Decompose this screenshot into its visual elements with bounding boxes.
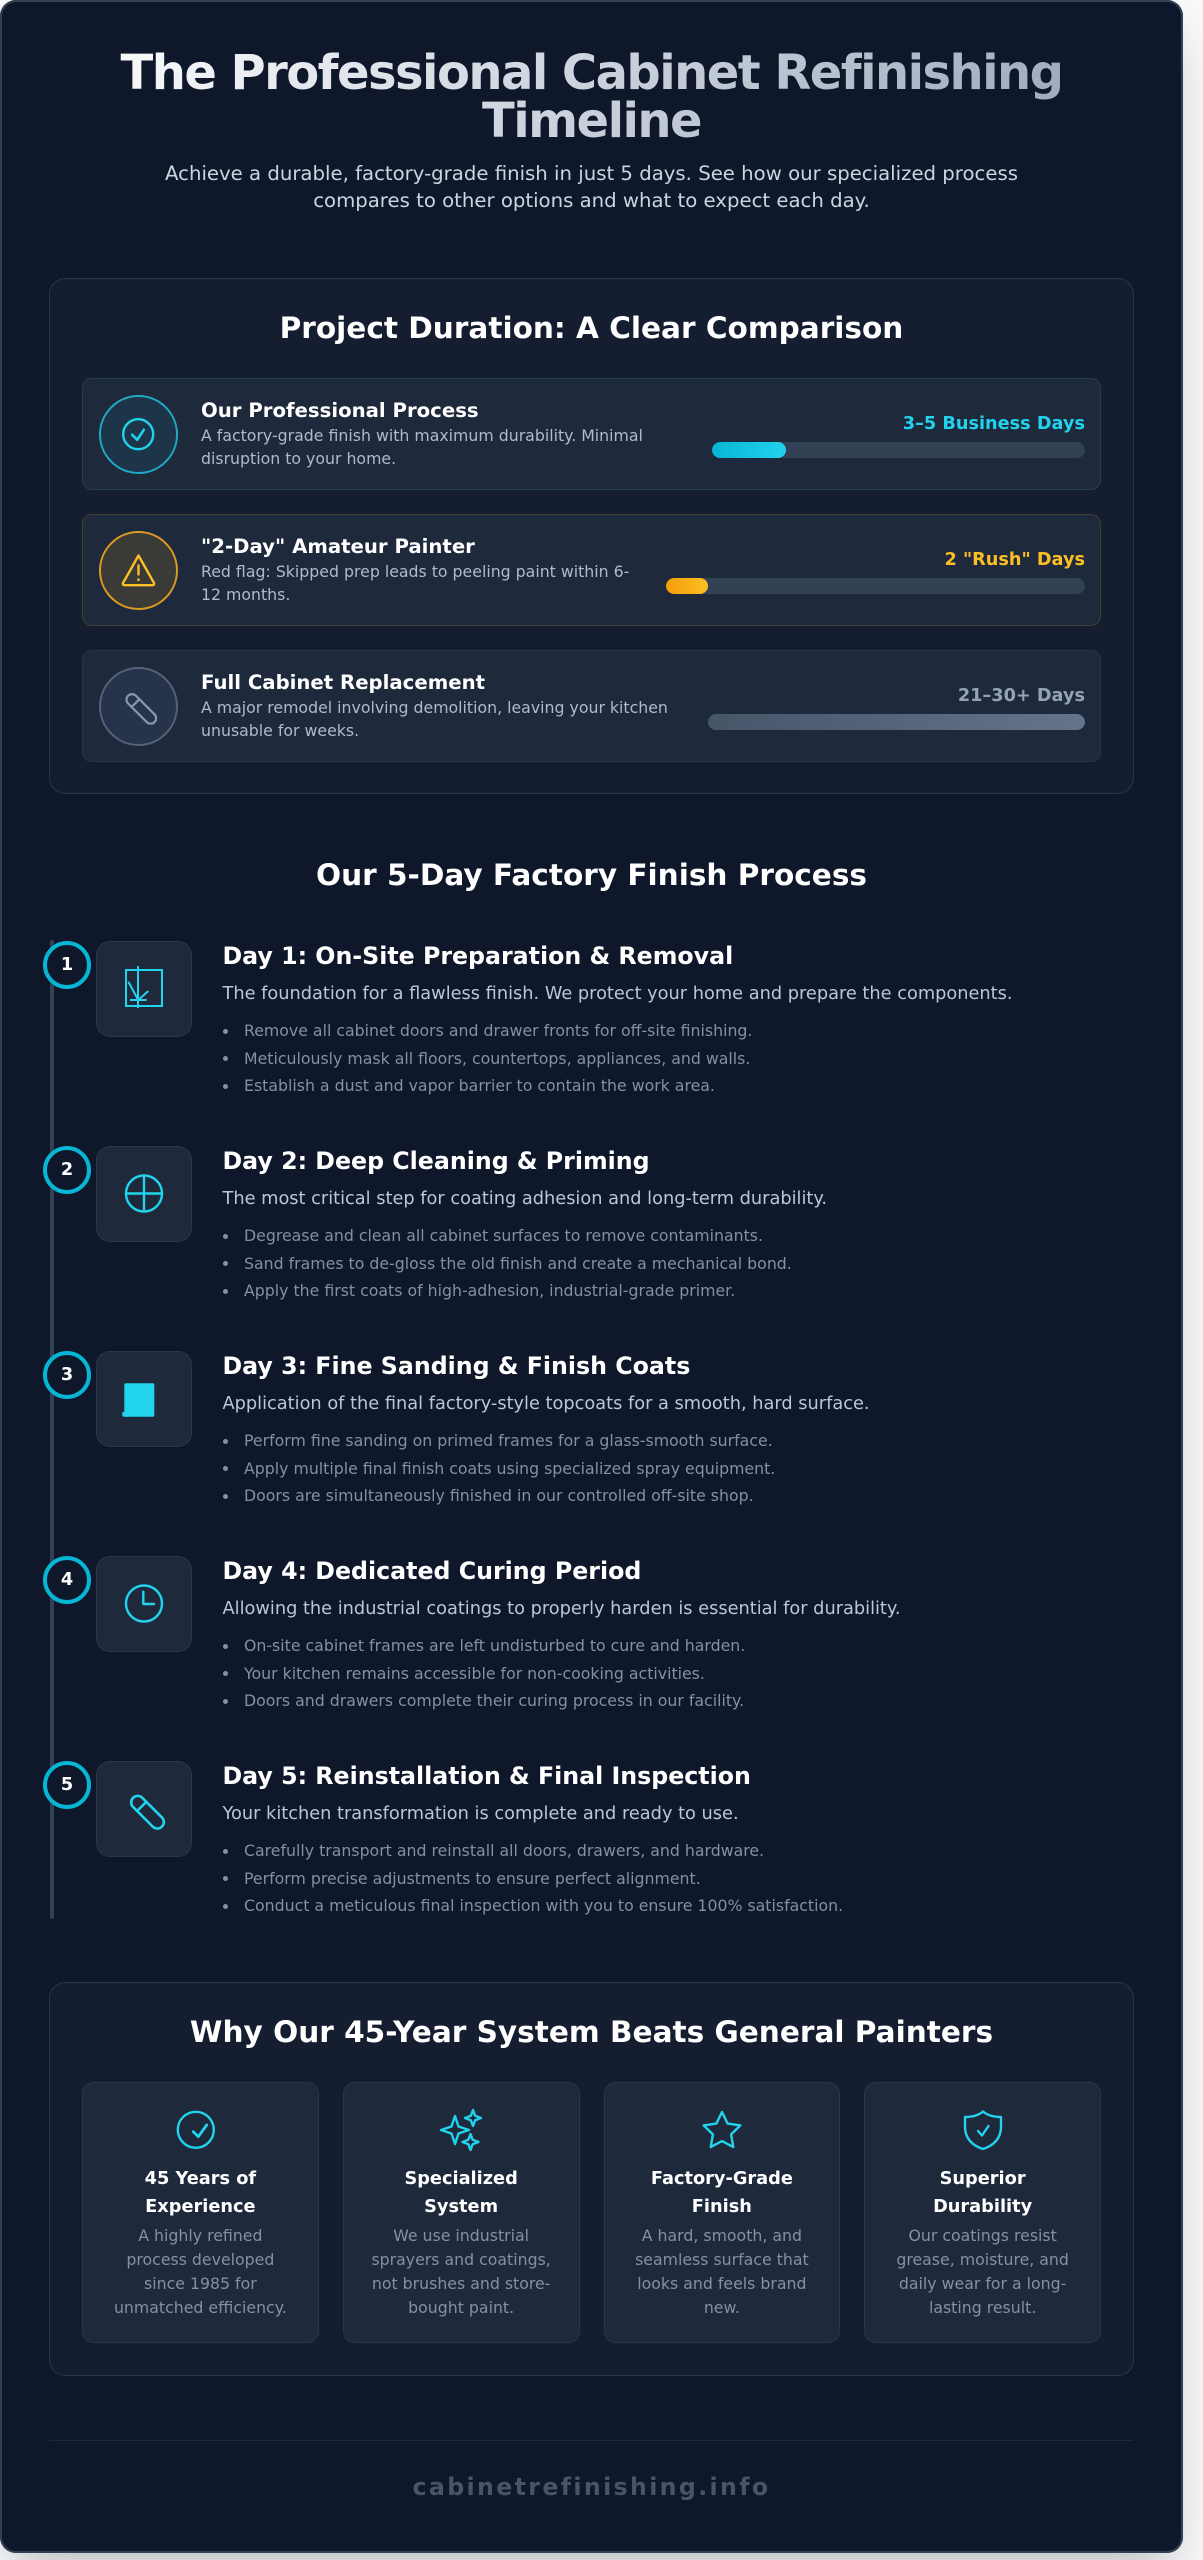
- day description: Your kitchen transformation is complete and ready to use.: [222, 1804, 739, 1824]
- card text: lasting result.: [929, 2298, 1036, 2316]
- number badge: [43, 1761, 91, 1809]
- step: day 2: [43, 1146, 827, 1300]
- subtitle: compares to other options and what to expect each day.: [313, 189, 870, 212]
- card text: unmatched efficiency.: [114, 2298, 287, 2316]
- description: amateur painter: 12 months.: [201, 585, 290, 604]
- bar: 21-30 days: [708, 714, 1085, 730]
- bullet: Degrease and clean all cabinet surfaces to remove contaminants.: [244, 1226, 763, 1245]
- bullet: Doors and drawers complete their curing process in our facility.: [244, 1691, 744, 1710]
- heading: 5-day process: Our 5-Day Factory Finish Process: [316, 858, 867, 892]
- title: [49, 48, 1134, 144]
- number badge: [43, 941, 91, 989]
- duration label: 2 "Rush" Days: [944, 550, 1085, 570]
- row: full cabinet replacement: [82, 650, 1101, 762]
- number badge: [43, 1556, 91, 1604]
- bullet: Doors are simultaneously finished in our controlled off-site shop.: [244, 1486, 754, 1505]
- card text: [635, 2226, 809, 2316]
- card text: grease, moisture, and: [896, 2250, 1069, 2269]
- row: amateur painter: [82, 514, 1101, 626]
- heading: project duration: Project Duration: A Clear Comparison: [280, 310, 903, 344]
- panel: project duration comparison: [49, 278, 1134, 794]
- row: our professional process: [82, 378, 1101, 490]
- text: our process: Our Professional Process: [201, 399, 479, 422]
- bullet: Remove all cabinet doors and drawer fronts for off-site finishing.: [244, 1021, 752, 1040]
- card text: [371, 2226, 551, 2316]
- card text: A highly refined: [138, 2226, 262, 2245]
- card title: [404, 2169, 518, 2217]
- card title: [651, 2169, 793, 2217]
- card text: Our coatings resist: [908, 2226, 1057, 2245]
- card text: We use industrial: [393, 2226, 529, 2245]
- card text: not brushes and store-: [372, 2274, 550, 2293]
- card: factory-grade finish: [604, 2082, 840, 2343]
- bar: 2 days: [666, 578, 1085, 594]
- step: day 1: [43, 941, 1013, 1095]
- icon: wrench: [96, 1761, 192, 1857]
- icon: shield check: [964, 2110, 1002, 2150]
- day description: Allowing the industrial coatings to properly harden is essential for durability.: [222, 1599, 901, 1619]
- card title: Experience: [145, 2197, 256, 2217]
- card title: Factory-Grade: [651, 2169, 793, 2189]
- subtitle: [165, 162, 1018, 212]
- icon: check circle: [176, 2110, 215, 2149]
- description: full replacement: [201, 698, 668, 740]
- number badge: 3: [61, 1365, 73, 1385]
- card title: 45 Years of: [145, 2169, 256, 2189]
- day title: Day 3: Fine Sanding & Finish Coats: [222, 1352, 690, 1380]
- card title: [145, 2169, 256, 2217]
- bullet: Perform fine sanding on primed frames for a glass-smooth surface.: [244, 1431, 773, 1450]
- panel: why our system: [49, 1982, 1134, 2376]
- card text: bought paint.: [408, 2298, 514, 2316]
- card: specialized system: [343, 2082, 580, 2343]
- description: full replacement: A major remodel involving demolition, leaving your kitchen: [201, 698, 668, 716]
- day title: Day 1: On-Site Preparation & Removal: [222, 942, 733, 970]
- bullet: Carefully transport and reinstall all doors, drawers, and hardware.: [244, 1841, 764, 1860]
- bar: 3-5 days: [712, 442, 1085, 458]
- card text: sprayers and coatings,: [371, 2250, 551, 2269]
- card text: A hard, smooth, and: [642, 2226, 802, 2245]
- icon: wrench: [98, 666, 178, 746]
- card title: [933, 2169, 1032, 2217]
- description: our process: A factory-grade finish with maximum durability. Minimal: [201, 426, 643, 444]
- card: 45 years: [82, 2082, 319, 2343]
- day description: The most critical step for coating adhesion and long-term durability.: [222, 1189, 827, 1209]
- number badge: 5: [61, 1775, 73, 1795]
- day description: Application of the final factory-style topcoats for a smooth, hard surface.: [222, 1394, 870, 1414]
- footer website: cabinetrefinishing.info: [412, 2473, 771, 2501]
- icon: warning triangle: [98, 530, 178, 610]
- number badge: 1: [61, 955, 73, 975]
- card title: Superior: [940, 2169, 1026, 2189]
- card: superior durability: [864, 2082, 1101, 2343]
- title: Timeline: [482, 92, 701, 148]
- card text: [114, 2226, 287, 2316]
- card text: seamless surface that: [635, 2250, 809, 2269]
- icon: filled sanding block: [96, 1351, 192, 1447]
- bullet: Establish a dust and vapor barrier to contain the work area.: [244, 1076, 715, 1095]
- number badge: 2: [61, 1160, 73, 1180]
- description: our process: [201, 426, 643, 468]
- description: full replacement: unusable for weeks.: [201, 721, 359, 740]
- card text: looks and feels brand: [637, 2274, 806, 2293]
- icon: removal box: [96, 941, 192, 1037]
- icon: clock: [96, 1556, 192, 1652]
- card text: [896, 2226, 1069, 2316]
- day title: Day 4: Dedicated Curing Period: [222, 1557, 641, 1585]
- bullet: Perform precise adjustments to ensure perfect alignment.: [244, 1869, 701, 1888]
- day title: Day 2: Deep Cleaning & Priming: [222, 1147, 650, 1175]
- bullet: Conduct a meticulous final inspection with you to ensure 100% satisfaction.: [244, 1896, 843, 1915]
- heading: why our system: Why Our 45-Year System Beats General Painters: [190, 2014, 993, 2048]
- card text: since 1985 for: [144, 2274, 257, 2293]
- text: amateur painter: "2-Day" Amateur Painter: [201, 535, 475, 558]
- description: amateur painter: Red flag: Skipped prep leads to peeling paint within 6-: [201, 562, 629, 580]
- timeline vertical line: [50, 940, 54, 1919]
- step: day 5: [43, 1761, 843, 1915]
- description: amateur painter: [201, 562, 629, 604]
- icon: sparkles: [440, 2108, 482, 2152]
- card title: System: [424, 2197, 498, 2217]
- bullet: Apply the first coats of high-adhesion, industrial-grade primer.: [244, 1281, 735, 1300]
- number badge: [43, 1146, 91, 1194]
- day title: Day 5: Reinstallation & Final Inspection: [222, 1762, 751, 1790]
- bullet: Meticulously mask all floors, countertops, appliances, and walls.: [244, 1049, 750, 1068]
- text: full replacement: Full Cabinet Replacement: [201, 671, 485, 694]
- icon: star: [702, 2110, 742, 2148]
- step: day 3: [43, 1351, 870, 1505]
- step: day 4: [43, 1556, 901, 1710]
- icon: check circle: [98, 394, 178, 474]
- duration label: 21–30+ Days: [958, 686, 1085, 706]
- duration label: 3–5 Business Days: [903, 414, 1085, 434]
- icon: crosshair circle: [96, 1146, 192, 1242]
- card text: daily wear for a long-: [899, 2274, 1066, 2293]
- bullet: On-site cabinet frames are left undisturbed to cure and harden.: [244, 1636, 745, 1655]
- description: our process: disruption to your home.: [201, 449, 396, 468]
- subtitle: Achieve a durable, factory-grade finish in just 5 days. See how our specialized process: [165, 162, 1018, 185]
- card title: Specialized: [404, 2169, 518, 2189]
- bullet: Apply multiple final finish coats using specialized spray equipment.: [244, 1459, 775, 1478]
- card title: Durability: [933, 2197, 1032, 2217]
- card text: new.: [704, 2298, 740, 2316]
- number badge: 4: [61, 1570, 73, 1590]
- number badge: [43, 1351, 91, 1399]
- day description: The foundation for a flawless finish. We protect your home and prepare the components.: [222, 984, 1013, 1004]
- bullet: Sand frames to de-gloss the old finish and create a mechanical bond.: [244, 1254, 792, 1273]
- card text: process developed: [126, 2250, 274, 2269]
- title: The Professional Cabinet Refinishing: [121, 44, 1062, 100]
- bullet: Your kitchen remains accessible for non-cooking activities.: [244, 1664, 705, 1683]
- card title: Finish: [692, 2197, 752, 2217]
